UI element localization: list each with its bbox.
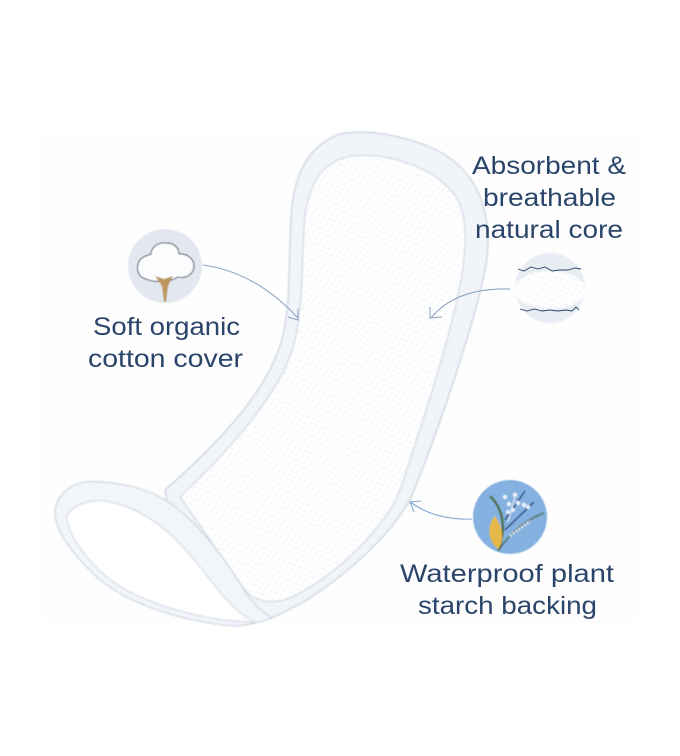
icon: plant: [473, 480, 547, 554]
arrow: core to pad: [430, 289, 510, 318]
arrow: cotton to cover: [203, 265, 298, 320]
label: natural core: breathable: [483, 184, 616, 212]
label: cotton cover: [88, 313, 243, 373]
label: natural core: Absorbent &: [472, 152, 626, 180]
label: cotton cover: cotton cover: [88, 345, 243, 373]
label: plant backing: Waterproof plant: [400, 560, 614, 588]
label: natural core: [472, 152, 626, 244]
callout: natural core: [430, 152, 626, 323]
label: natural core: natural core: [475, 216, 623, 244]
pad illustration: [55, 132, 488, 626]
icon: core layers: [514, 253, 586, 323]
label: cotton cover: Soft organic: [93, 313, 240, 341]
callout: plant starch backing: [400, 480, 614, 620]
label: plant backing: starch backing: [418, 592, 597, 620]
pad absorbent core: [180, 155, 465, 602]
flap inner white surface: [66, 501, 254, 622]
callout: cotton cover: [88, 229, 298, 373]
pad outer wing band: [165, 132, 488, 618]
arrow: plant to backing: [410, 501, 472, 519]
background panel: [40, 130, 640, 625]
label: plant backing: [400, 560, 614, 620]
icon: cotton boll: [128, 229, 202, 303]
pad front flap: [55, 482, 272, 626]
